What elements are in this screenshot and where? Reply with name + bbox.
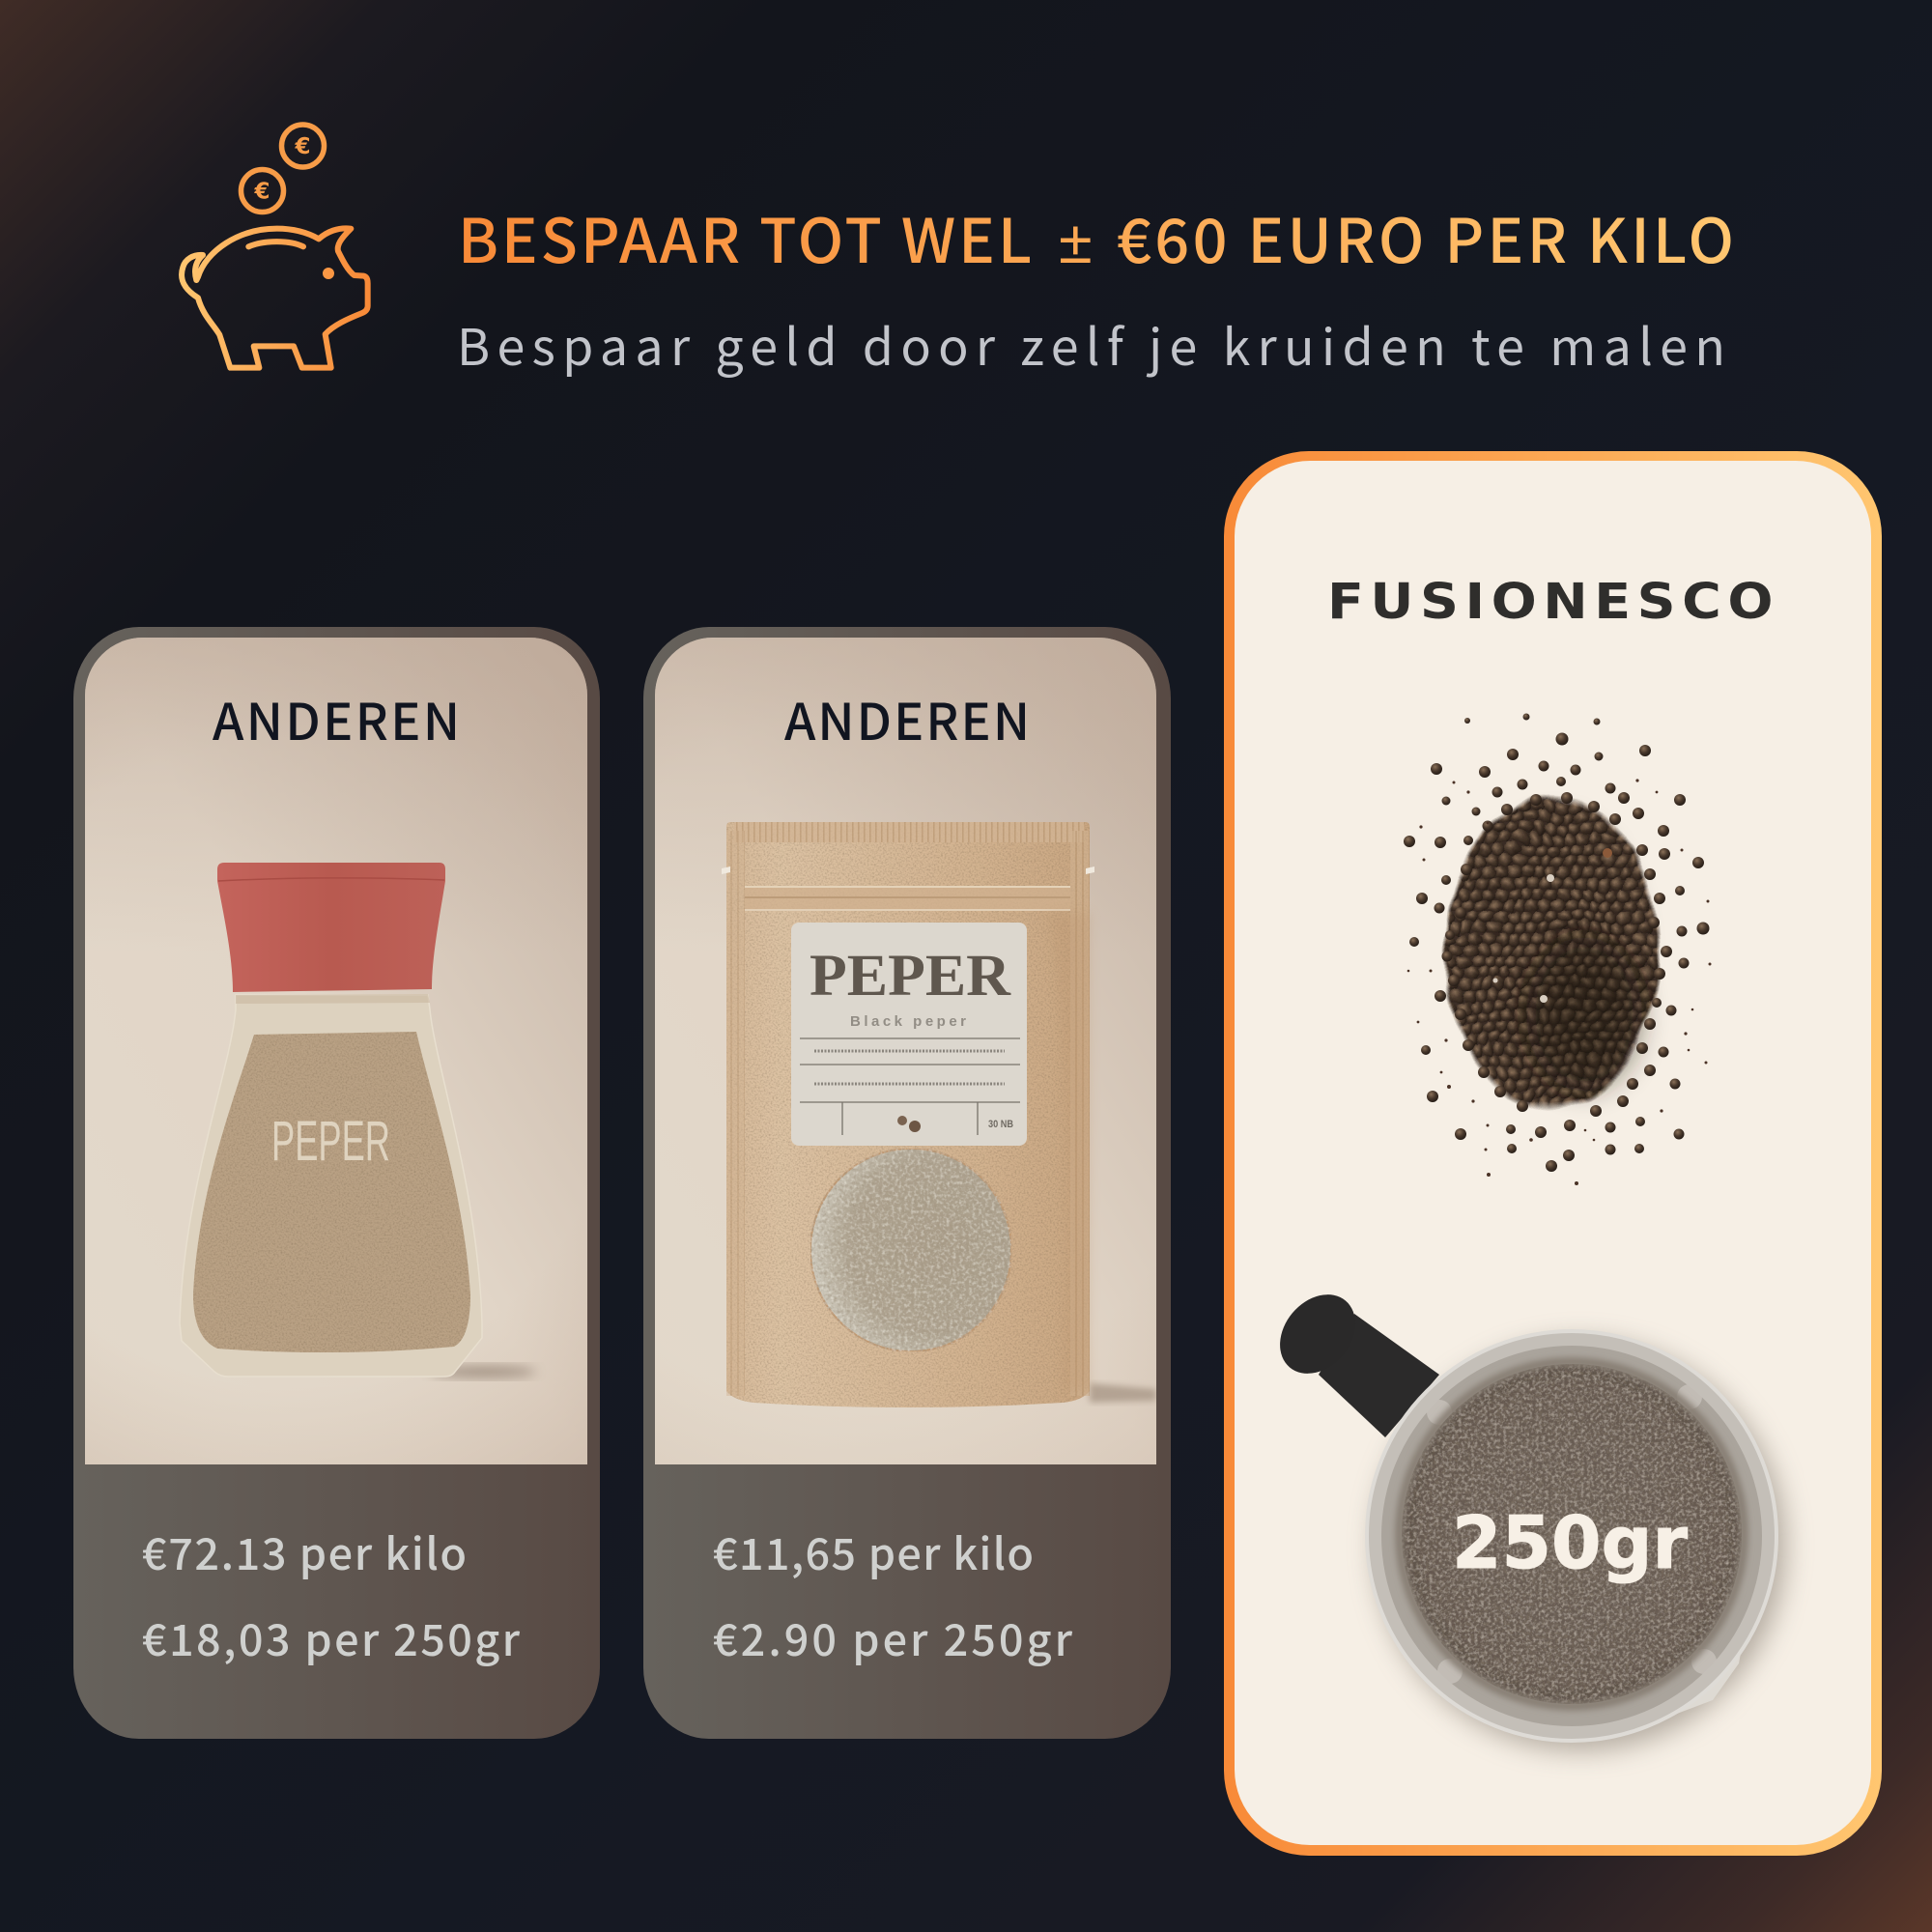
pouch window with powder: [810, 1149, 1011, 1351]
panel background: [643, 627, 1171, 1739]
icon: glass jar: [180, 995, 482, 1377]
grinder shadow: [1376, 1341, 1785, 1750]
grinder spout: [1662, 1633, 1745, 1719]
weight label: 250gr: [1452, 1500, 1688, 1585]
icon: piggy body: [182, 228, 368, 368]
subtitle: Bespaar geld door zelf je kruiden te malen: [457, 307, 1725, 380]
heading: anderen: ANDEREN: [213, 682, 460, 754]
shadow of jar: [430, 1366, 536, 1378]
panel: anderen kraft pouch: [643, 627, 1171, 1739]
price lines: [713, 1520, 1073, 1668]
photo area: [85, 638, 587, 1464]
panel background: [73, 627, 600, 1739]
price lines: €2.90 per 250gr: [713, 1605, 1073, 1668]
jar powder: [193, 1032, 470, 1352]
shadow of pouch: [1090, 1383, 1156, 1403]
icon: kraft pouch: [726, 822, 1090, 1407]
icon: piggy bank with euro coins: [182, 125, 368, 368]
photo area: [655, 638, 1156, 1464]
ground pepper: [1402, 1364, 1742, 1704]
grinder rim: [1367, 1331, 1776, 1741]
price lines: €11,65 per kilo: [713, 1520, 1034, 1582]
price lines: [142, 1520, 521, 1668]
logo: fusionesco: FUSIONESCO: [1327, 574, 1779, 631]
title: BESPAAR TOT WEL: [458, 193, 1032, 281]
jar lid: [217, 863, 445, 992]
image: grinder bowl with ground pepper: [1264, 1280, 1785, 1750]
panel cream background: [1235, 461, 1871, 1845]
price lines: €18,03 per 250gr: [142, 1605, 521, 1668]
price lines: €72.13 per kilo: [142, 1520, 467, 1582]
panel gradient border: [1224, 451, 1882, 1856]
heading: anderen: ANDEREN: [784, 682, 1030, 754]
icon: lower euro coin: €: [253, 180, 270, 205]
grinder bumps: [1427, 1384, 1717, 1684]
icon: lower euro coin: [242, 170, 284, 213]
pouch label: 30 NB: [988, 1119, 1013, 1130]
panel: fusionesco highlighted: [1224, 451, 1882, 1856]
powder soft edge: [1400, 1362, 1744, 1706]
icon: upper euro coin: €: [294, 134, 311, 159]
pouch label: PEPER: [810, 944, 1011, 1009]
icon: upper euro coin: [282, 125, 325, 167]
title: [458, 193, 1734, 281]
pouch label: [791, 923, 1027, 1146]
pouch label: Black peper: [850, 1013, 966, 1030]
title: €60 EURO PER KILO: [1117, 193, 1734, 281]
image: whole peppercorns: [1391, 713, 1719, 1185]
pouch seams: [734, 822, 1084, 842]
jar label: PEPER: [271, 1110, 390, 1173]
title: ±: [1059, 209, 1093, 276]
panel: anderen spice jar: [73, 627, 600, 1739]
grinder handle: [1264, 1280, 1439, 1437]
